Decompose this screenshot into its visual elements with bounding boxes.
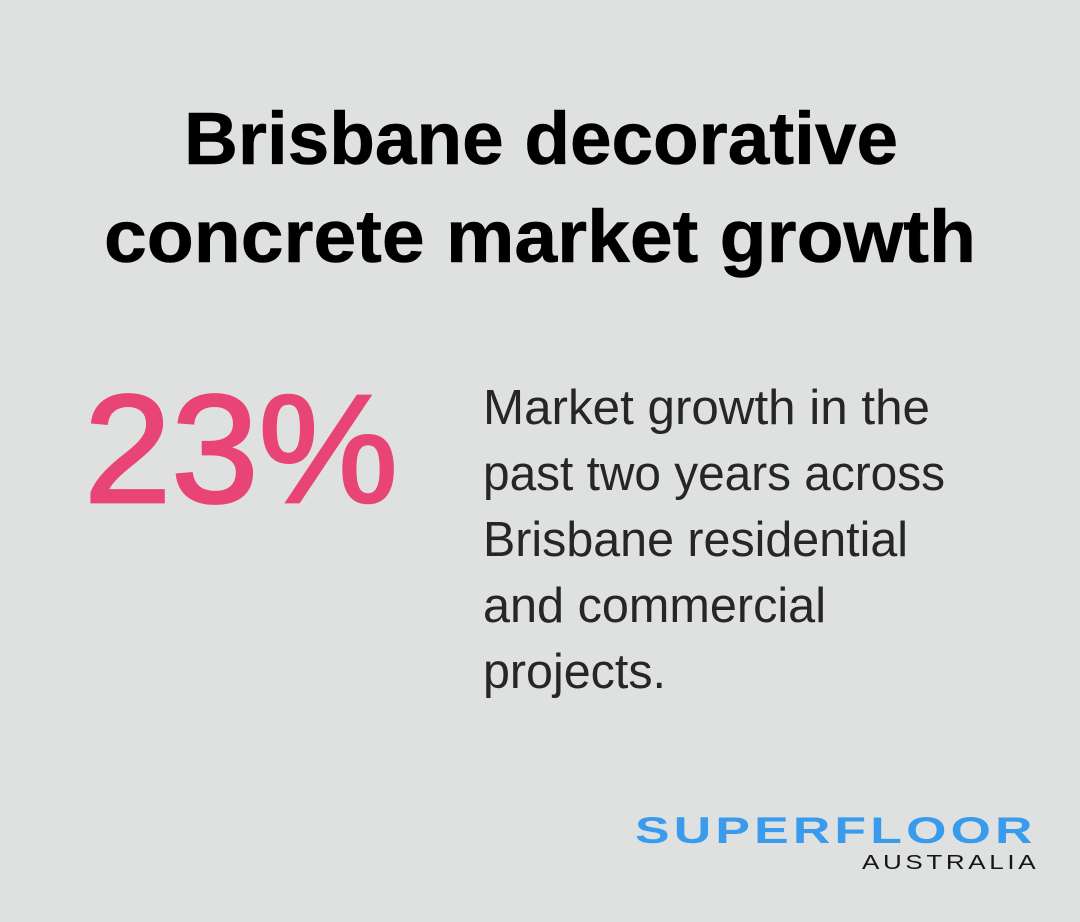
statistic: 23%: 23% (84, 363, 398, 535)
description text: and commercial (483, 579, 826, 633)
description text: Market growth in the (483, 381, 930, 435)
title: concrete market growth (104, 195, 976, 278)
title (104, 97, 976, 278)
description text (483, 381, 945, 699)
title: Brisbane decorative (184, 97, 898, 180)
logo subtitle: AUSTRALIA (862, 851, 1039, 873)
logo wordmark: SUPERFLOOR (635, 809, 1037, 851)
description text: projects. (483, 645, 666, 699)
logo: Superfloor Australia (635, 809, 1039, 873)
description text: Brisbane residential (483, 513, 908, 567)
description text: past two years across (483, 447, 945, 501)
